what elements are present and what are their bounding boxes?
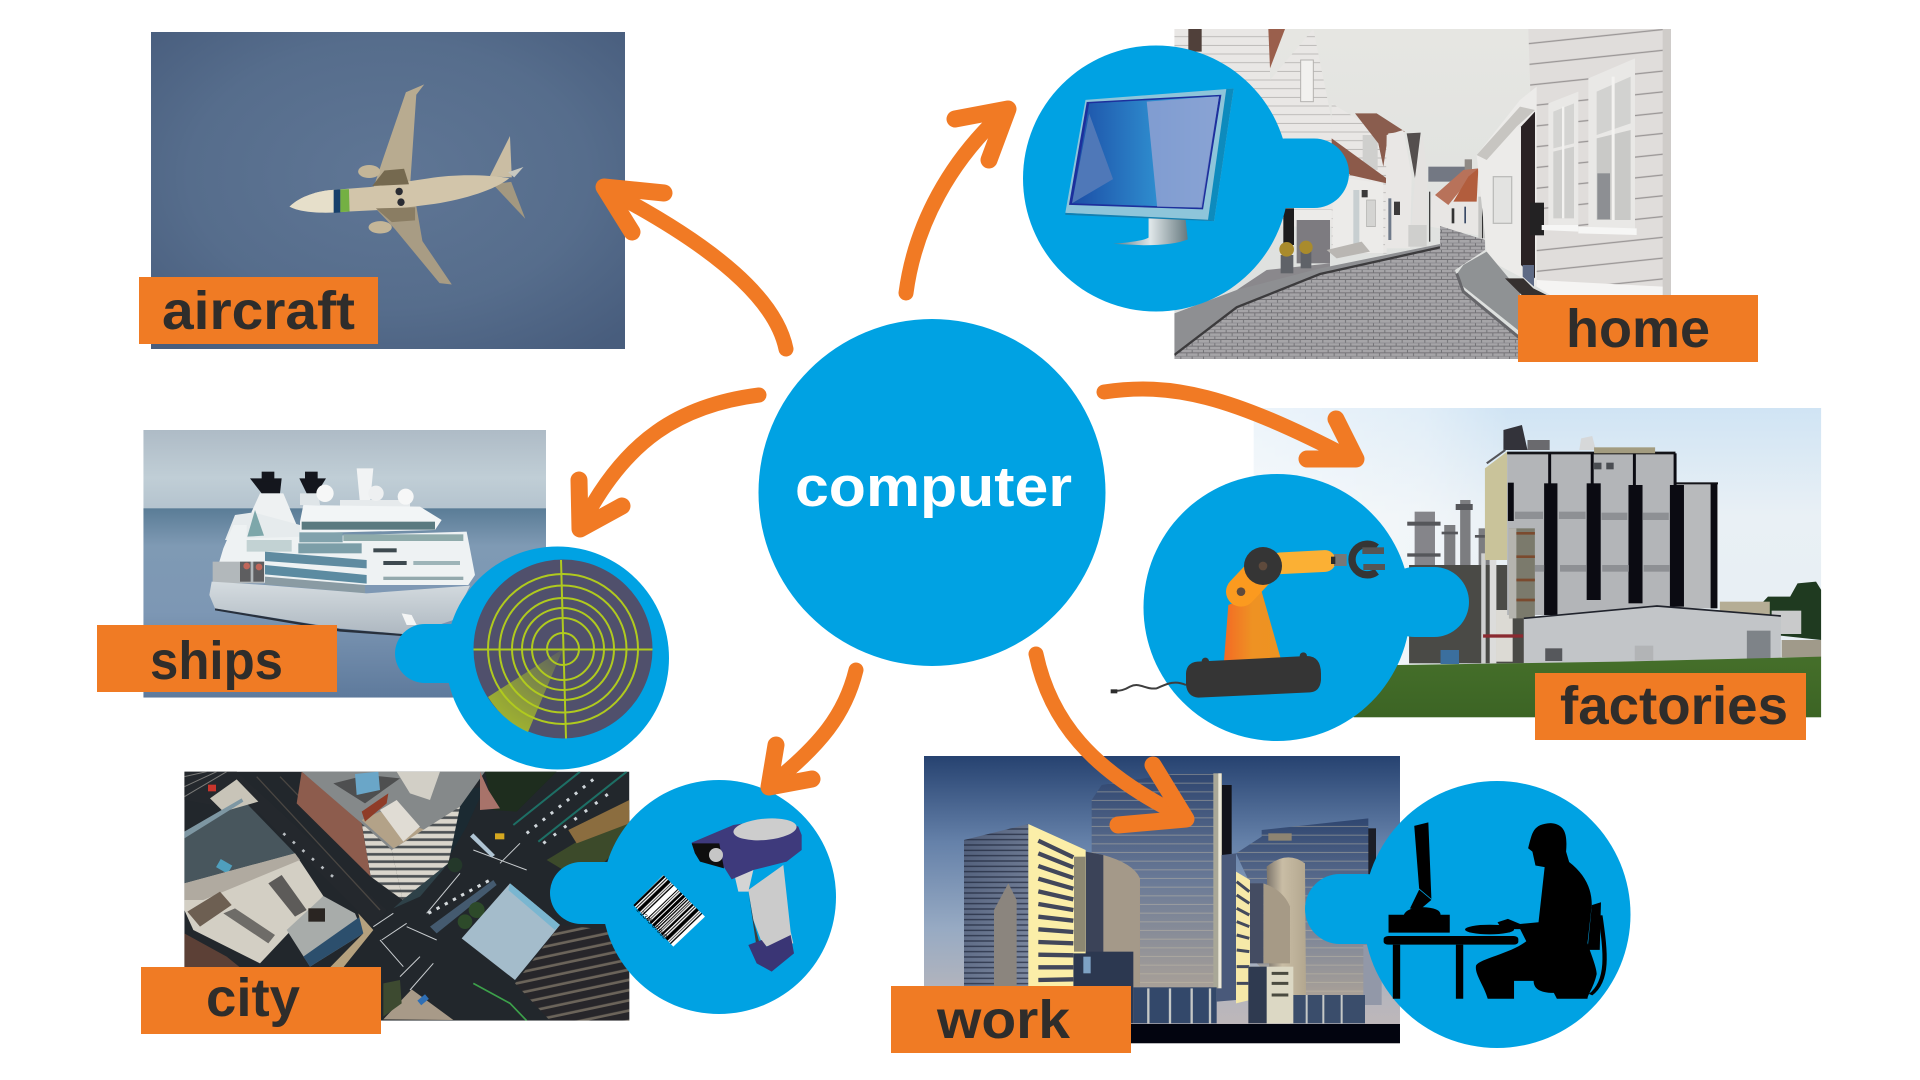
- cobblestone road: [1174, 226, 1520, 359]
- photo panel: office towers: [924, 756, 1400, 1043]
- arrow: computer to home: [906, 109, 1008, 293]
- photo panel: cruise ship at sea: [143, 430, 546, 698]
- icon: barcode scanner and barcode: 1 2345 67890: [635, 907, 668, 941]
- aircraft photo subject: airliner: [290, 84, 525, 284]
- right tower: [1236, 818, 1382, 1023]
- arrow: computer to ships: [579, 395, 759, 529]
- cruise ship: [209, 468, 475, 636]
- right sidewalk: [1457, 252, 1520, 332]
- label: work: [891, 986, 1131, 1053]
- photo panel: industrial plant: [1254, 408, 1821, 717]
- label: aircraft: aircraft: [162, 281, 355, 341]
- middle houses: [1332, 103, 1387, 253]
- label: work: work: [936, 990, 1071, 1050]
- left building with cream stripes: [964, 824, 1086, 987]
- arrow: computer to city: [769, 670, 856, 787]
- low warehouse: [1524, 606, 1781, 663]
- icon: radar screen: [474, 560, 652, 738]
- central label: computer: [795, 455, 1072, 519]
- mid curved building: [1086, 852, 1140, 987]
- tall building: [1485, 425, 1718, 615]
- label: ships: [97, 625, 337, 692]
- central tower: [1092, 773, 1232, 1023]
- label: home: [1518, 295, 1758, 362]
- tree line: [1759, 582, 1821, 640]
- label: home: home: [1566, 299, 1710, 359]
- road markings, cars and intersection: [283, 777, 613, 990]
- label: city: [141, 967, 381, 1034]
- cream office building: [184, 853, 323, 963]
- arrow: computer to factories: [1104, 389, 1356, 459]
- light roof building: [462, 883, 560, 980]
- right house, wall with siding: [1528, 29, 1663, 284]
- icon: barcode scanner and barcode: [633, 816, 802, 972]
- icon: desktop monitor: [1065, 89, 1234, 245]
- label: aircraft: [139, 277, 378, 344]
- bubble: work silhouette at computer: [1305, 781, 1630, 1048]
- bottom lot: [383, 989, 453, 1020]
- label: ships: ships: [150, 631, 283, 691]
- bubble: factory robot arm: [1111, 474, 1469, 741]
- photo panel: street with white wooden houses: [1174, 29, 1671, 359]
- label: city: city: [206, 968, 300, 1028]
- potted flowers: [1279, 241, 1313, 273]
- photo panel: aerial view of city: [184, 772, 629, 1021]
- distillation columns: [1407, 500, 1527, 664]
- top-left road: [184, 772, 237, 800]
- windows of right house: [1537, 58, 1663, 295]
- label: factories: factories: [1560, 676, 1788, 736]
- central tall building: [297, 772, 485, 908]
- left house, gable and siding: [1270, 29, 1333, 227]
- arrow: computer to aircraft: [604, 187, 786, 349]
- narrow connecting building: [1217, 853, 1293, 1023]
- arrow: computer to work: [1036, 654, 1186, 825]
- slate roof building: [184, 798, 295, 883]
- central bubble: computer: [758, 319, 1106, 666]
- photo panel: aircraft in the sky: [151, 32, 625, 349]
- bubble: ship radar: [395, 546, 669, 770]
- icon: robot arm: [1111, 544, 1385, 698]
- grass lawn: [1354, 657, 1821, 717]
- dark striped high-rise: [515, 925, 629, 1021]
- lattice tower: [1509, 528, 1535, 618]
- lower block with blue side: [287, 896, 363, 967]
- bubble: home monitor: [1023, 46, 1349, 312]
- top right greenery: [485, 772, 557, 812]
- bubble: barcode scanner: [550, 780, 836, 1014]
- distant houses: [1428, 159, 1487, 242]
- icon: person at desk: [1384, 822, 1605, 999]
- dark ground strip: [1131, 1024, 1400, 1044]
